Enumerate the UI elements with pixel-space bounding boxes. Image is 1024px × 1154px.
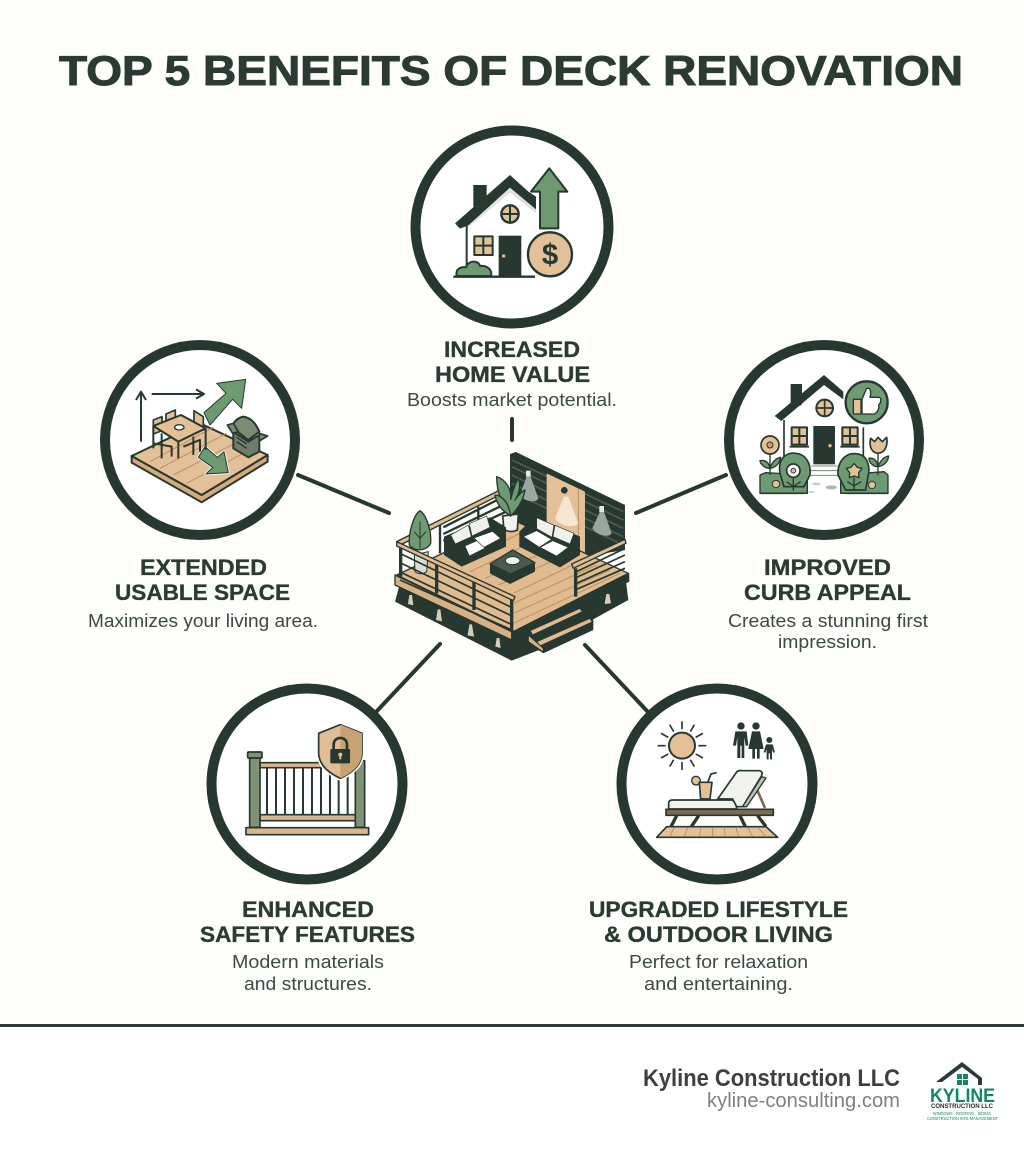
logo: CONSTRUCTION LLC (931, 1103, 993, 1110)
icon ring: curb appeal (729, 345, 919, 535)
logo (927, 1062, 998, 1121)
back wall (510, 452, 625, 557)
description: increased home value: Boosts market potential. (407, 390, 617, 410)
left back rail (397, 490, 508, 553)
icon: deck with dining set and grill (132, 379, 268, 502)
connector lines (298, 419, 726, 712)
heading: extended usable space (115, 555, 290, 605)
heading: extended usable space: USABLE SPACE (115, 580, 290, 605)
description: enhanced safety features: and structures. (244, 974, 372, 994)
icon ring: usable space (105, 345, 295, 535)
logo: KYLINE (930, 1086, 995, 1107)
footer (0, 1024, 1024, 1154)
icon: sun, family and lounger (657, 722, 778, 837)
icon ring: home value (416, 130, 608, 324)
description: extended usable space: Maximizes your living area. (88, 611, 318, 631)
under-deck lights (408, 594, 611, 648)
heading: enhanced safety features: ENHANCED (242, 897, 374, 922)
right sofa (519, 517, 580, 567)
icon ring: lifestyle (622, 688, 812, 880)
panel: upgraded lifestyle and outdoor living (589, 688, 848, 994)
description: enhanced safety features (232, 952, 384, 994)
heading: increased home value: INCREASED (444, 337, 580, 362)
description: upgraded lifestyle: Perfect for relaxation (629, 952, 808, 972)
right railing (572, 539, 626, 597)
heading: improved curb appeal: IMPROVED (764, 555, 891, 580)
icon: house with rising value: $ (542, 238, 558, 271)
footer rule (0, 1024, 1024, 1027)
coffee table (490, 550, 535, 584)
heading: upgraded lifestyle and outdoor living (589, 897, 848, 947)
title: TOP 5 BENEFITS OF DECK RENOVATION (59, 47, 963, 94)
deck base (395, 573, 628, 661)
heading: enhanced safety features: SAFETY FEATURES (200, 922, 415, 947)
heading: extended usable space: EXTENDED (140, 555, 267, 580)
heading: enhanced safety features (200, 897, 415, 947)
panel: increased home value (407, 130, 617, 410)
company name: Kyline Construction LLC (643, 1065, 900, 1092)
description: improved curb appeal: impression. (778, 632, 877, 652)
panel: enhanced safety features (200, 688, 415, 994)
description: upgraded lifestyle (629, 952, 808, 994)
logo: WINDOWS · ROOFING · SIDING (933, 1111, 991, 1116)
description: enhanced safety features: Modern materials (232, 952, 384, 972)
icon: house with garden and thumbs up (760, 375, 889, 493)
front railing (397, 542, 515, 632)
description: improved curb appeal (728, 611, 928, 652)
icon: house with rising value (453, 168, 572, 277)
heading: increased home value (435, 337, 590, 387)
description: upgraded lifestyle: and entertaining. (644, 974, 793, 994)
central deck illustration (395, 452, 629, 661)
deck floor (395, 520, 629, 640)
icon ring: safety (212, 688, 402, 880)
heading: improved curb appeal (744, 555, 911, 605)
logo: CONSTRUCTION SITE MANAGEMENT (927, 1116, 998, 1121)
small tree (409, 511, 431, 574)
website: kyline-consulting.com (707, 1090, 900, 1112)
left sofa (444, 516, 506, 567)
heading: upgraded lifestyle and outdoor living: UPGRADED LIFESTYLE (589, 897, 848, 922)
steps (528, 608, 593, 653)
footer background (0, 1025, 1024, 1154)
heading: improved curb appeal: CURB APPEAL (744, 580, 911, 605)
heading: upgraded lifestyle and outdoor living: & OUTDOOR LIVING (604, 922, 833, 947)
description: improved curb appeal: Creates a stunning first (728, 611, 928, 631)
large potted plant (495, 477, 525, 532)
icon: railing with security shield (246, 725, 369, 835)
heading: increased home value: HOME VALUE (435, 362, 590, 387)
panel: improved curb appeal (728, 345, 928, 652)
panel: extended usable space (88, 345, 318, 631)
